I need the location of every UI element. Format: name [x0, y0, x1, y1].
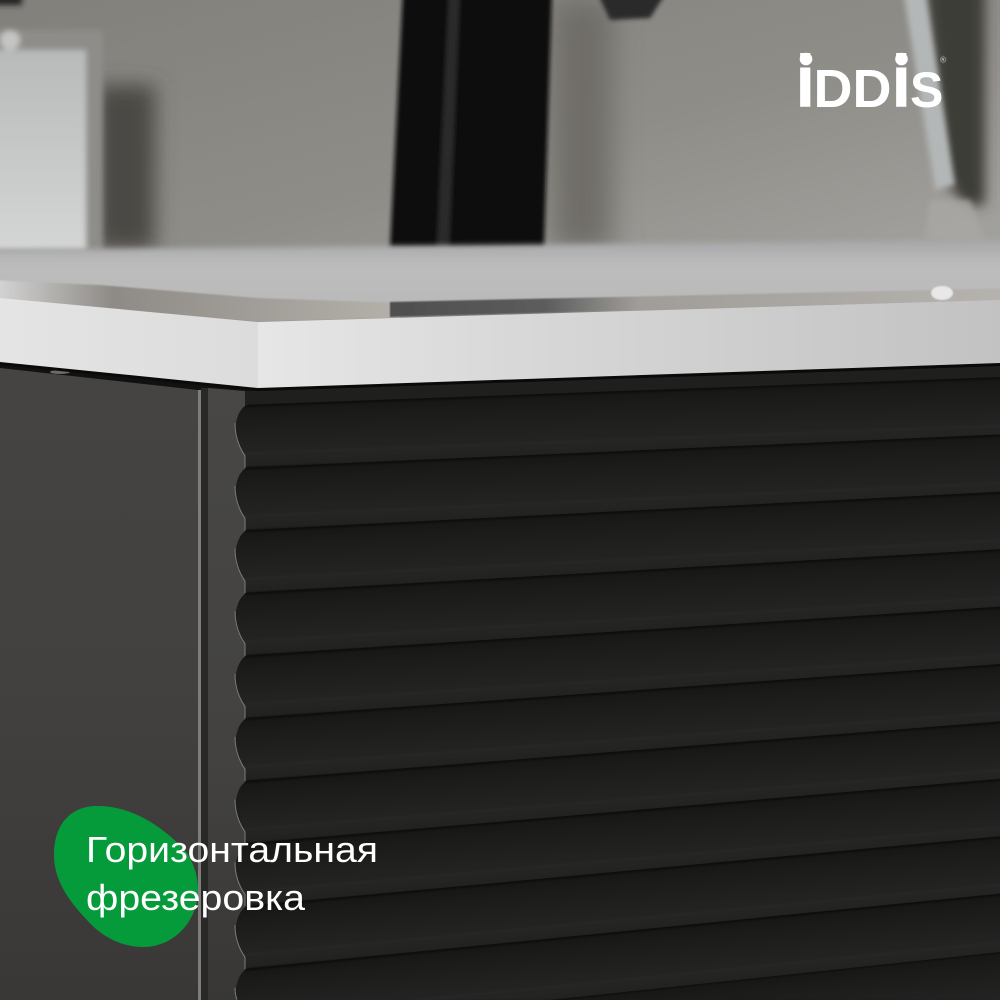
registered mark: [938, 55, 948, 64]
logo dot left: [800, 53, 812, 65]
caption: Горизонтальная: [86, 829, 378, 870]
shadow under countertop: [0, 361, 1000, 391]
left door panel: [0, 368, 198, 1000]
logo dot right: [895, 53, 908, 65]
door gap: [201, 388, 208, 1000]
logo: iDDiS: i: [891, 40, 912, 123]
logo: iDDiS: S: [910, 62, 943, 118]
blurred black faucet: [390, 0, 668, 248]
logo: iDDiS: DD: [814, 59, 892, 119]
cabinet side panel: [208, 388, 245, 1000]
logo: iDDiS: [795, 40, 948, 123]
green blob: [54, 806, 198, 947]
caption: [86, 829, 378, 918]
logo: iDDiS: i: [795, 40, 816, 123]
top strip of fronts: [245, 366, 1000, 420]
door edge: [198, 390, 201, 1000]
chrome reflection right: [390, 288, 1000, 317]
white countertop: [0, 240, 1000, 391]
chrome reflection left: [0, 280, 400, 322]
blurred bottle: [0, 0, 103, 252]
blurred background wall: [0, 0, 1000, 270]
registered mark: ®: [940, 56, 946, 64]
highlight on basin edge: [931, 286, 953, 300]
horizontal milled ridges: [235, 377, 1000, 1000]
blurred chrome spout: [903, 0, 985, 240]
countertop front right: [258, 300, 1000, 388]
door hinge detail: [50, 370, 70, 374]
cabinet base: [0, 355, 1000, 1000]
caption: фрезеровка: [86, 877, 306, 918]
countertop front left: [0, 298, 258, 388]
